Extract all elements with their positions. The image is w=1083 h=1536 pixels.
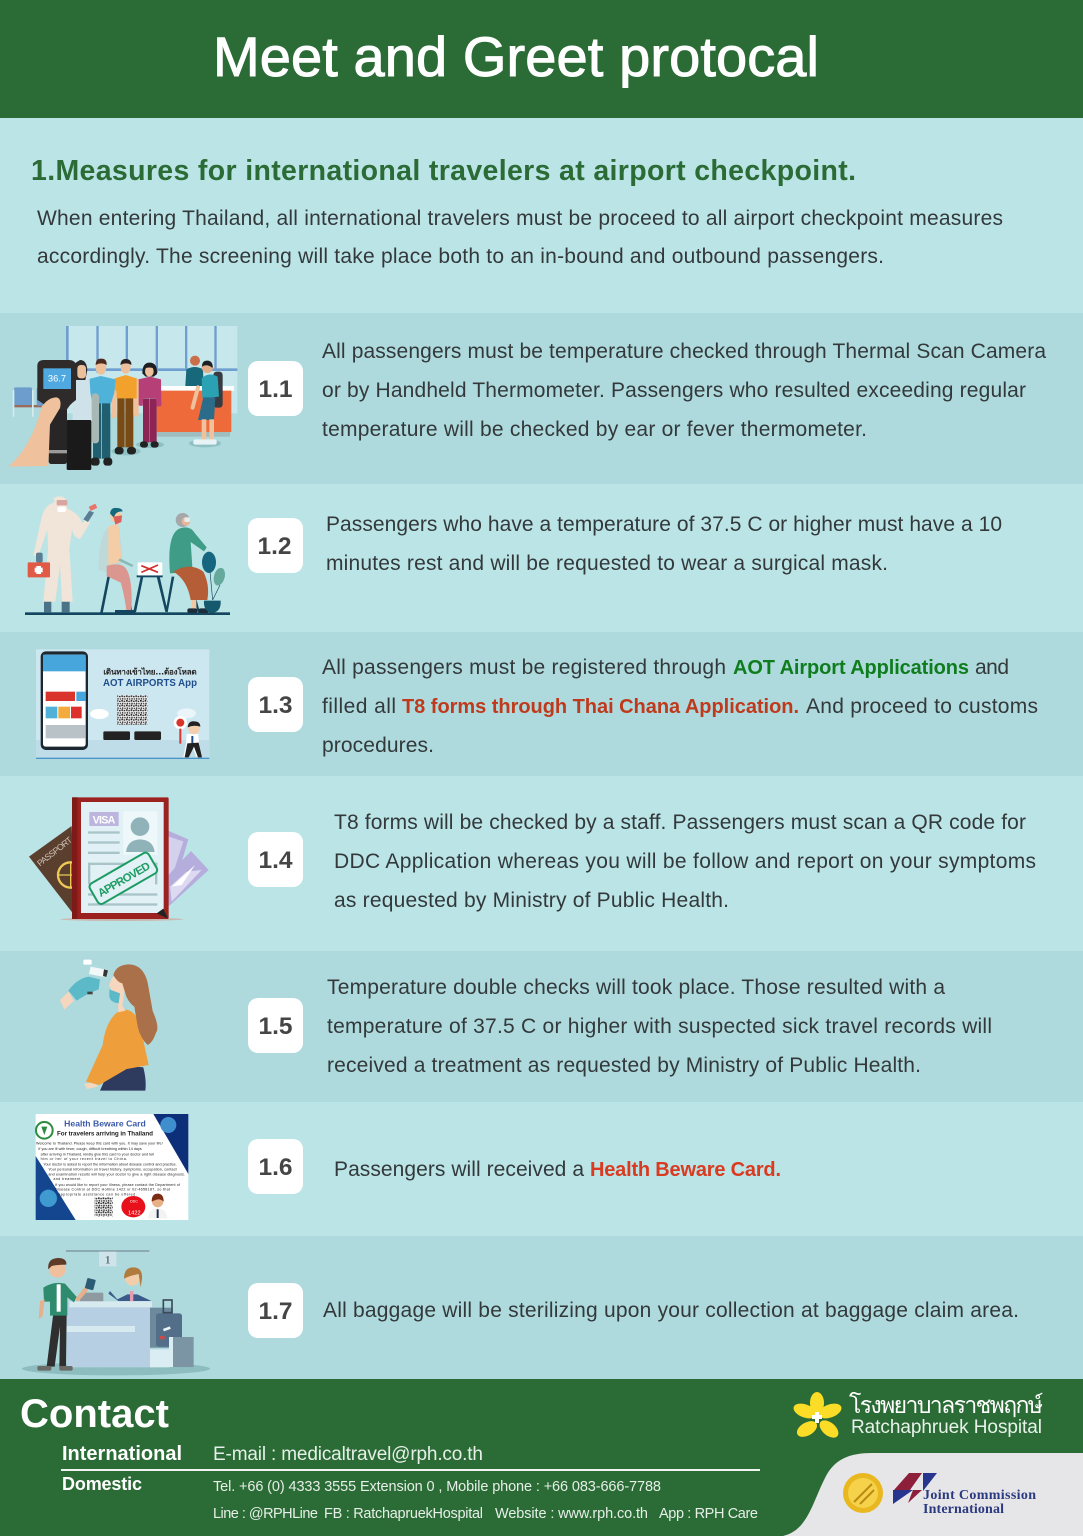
step text 1.7: All baggage will be sterilizing upon your collection at baggage claim area. (323, 1299, 1019, 1322)
panel: step 1.1 (0, 313, 1083, 484)
illustration: Health Beware Card: Disease Control at DDC Hotline 1422 or 02-4658187, so that (55, 1188, 170, 1192)
badge 1.4 (248, 832, 303, 887)
badge 1.6: 1.6 (258, 1154, 293, 1181)
step text 1.3: AOT Airport Applications (733, 657, 969, 679)
contact heading: Contact (20, 1392, 169, 1436)
domestic contact: FB : RatchapruekHospital (324, 1506, 483, 1522)
step text 1.2 (326, 513, 1002, 575)
domestic contact: Tel. +66 (0) 4333 3555 Extension 0 , Mobile phone : +66 083-666-7788 (213, 1479, 661, 1495)
illustration: Health Beware Card: him or her of your recent travel to China. (41, 1157, 127, 1161)
badge 1.4: 1.4 (258, 847, 293, 874)
panel: step 1.6 (0, 1102, 1083, 1236)
illustration: approved visa and passport: VISA (93, 814, 116, 826)
illustration: Health Beware Card: and treatment. (53, 1177, 82, 1181)
badge 1.2 (248, 518, 303, 573)
illustration: Health Beware Card: and examination results will help your doctor to give a right disease diagnosis. (48, 1172, 185, 1176)
international contact: International (62, 1443, 182, 1465)
panel: step 1.3 (0, 632, 1083, 776)
badge 1.3 (248, 677, 303, 732)
illustration: approved visa and passport: PASSPORT (35, 834, 75, 868)
illustration: seated passengers resting (25, 496, 230, 615)
step text 1.4 (334, 811, 1036, 912)
step text 1.1: temperature will be checked by ear or fever thermometer. (322, 418, 867, 441)
badge 1.7 (248, 1283, 303, 1338)
intro paragraph: When entering Thailand, all international travelers must be proceed to all airport checkpoint measures (37, 207, 1003, 230)
step text 1.3: filled all (322, 695, 396, 718)
logo: Joint Commission International: Joint Commission (923, 1488, 1036, 1503)
illustration: AOT Airports App banner (36, 649, 209, 759)
hospital name: โรงพยาบาลราชพฤกษ์ (849, 1392, 1044, 1419)
illustration: approved visa and passport: APPROVED (96, 860, 153, 900)
international contact (62, 1443, 483, 1465)
illustration: Health Beware Card: after arriving in Thailand, kindly give this card to your doctor and tell (41, 1152, 154, 1156)
illustration: Health Beware Card: Welcome to Thailand. Please keep this card with you. It may save your life! (36, 1142, 163, 1146)
step text 1.3 (322, 656, 1038, 757)
badge 1.5: 1.5 (258, 1013, 293, 1040)
illustration: Health Beware Card: appropriate assistance can be offered. (58, 1192, 137, 1196)
step text 1.6 (334, 1158, 781, 1181)
section intro (0, 118, 1083, 313)
step text 1.3: and (975, 656, 1009, 679)
hospital name (849, 1392, 1044, 1438)
step text 1.5 (327, 976, 992, 1077)
step text 1.3: T8 forms through Thai Chana Application. (402, 696, 799, 718)
section heading: 1.Measures for international travelers at airport checkpoint. (31, 155, 856, 187)
illustration: Health Beware Card: Your doctor is asked to report the information about disease control and practice. (43, 1162, 177, 1166)
footer: contact (0, 1379, 1083, 1536)
step text 1.4: DDC Application whereas you will be follow and report on your symptoms (334, 850, 1036, 873)
logo: Joint Commission International (893, 1473, 1036, 1517)
badge 1.2: 1.2 (257, 533, 292, 560)
step text 1.3: All passengers must be registered through (322, 656, 726, 679)
illustration: forehead temperature check (60, 960, 157, 1091)
badge 1.7: 1.7 (258, 1298, 293, 1325)
header banner (0, 0, 1083, 118)
step text 1.4: T8 forms will be checked by a staff. Passengers must scan a QR code for (334, 811, 1026, 834)
panel: step 1.4 (0, 776, 1083, 951)
accreditation panel (783, 1453, 1083, 1536)
illustration: AOT Airports App banner: เดินทางเข้าไทย...ต้องโหลด (103, 666, 197, 676)
illustration: AOT Airports App banner: AOT AIRPORTS App (103, 678, 197, 689)
illustration: thermal scan of passengers: 36.7 (48, 374, 66, 384)
step text 1.4: as requested by Ministry of Public Health. (334, 889, 729, 912)
domestic contact: Line : @RPHLine (213, 1506, 318, 1522)
step text 1.1 (322, 340, 1046, 441)
panel: step 1.5 (0, 951, 1083, 1102)
illustration: Health Beware Card: If you are ill with fever, cough, difficult breathing within 14 days (38, 1147, 142, 1151)
badge 1.6 (248, 1139, 303, 1194)
step text 1.6: Passengers will received a (334, 1158, 584, 1181)
domestic contact: App : RPH Care (659, 1506, 758, 1522)
logo: hospital flower (792, 1392, 843, 1441)
international contact: E-mail : medicaltravel@rph.co.th (213, 1444, 483, 1465)
panel: step 1.2 (0, 484, 1083, 632)
illustration: thermal scan of passengers (8, 326, 237, 470)
badge 1.1: 1.1 (258, 376, 293, 403)
domestic contact (62, 1474, 758, 1522)
intro paragraph: accordingly. The screening will take place both to an in-bound and outbound passengers. (37, 245, 884, 268)
title: Meet and Greet protocal (213, 25, 819, 88)
illustration: Health Beware Card: DDC (130, 1200, 138, 1204)
illustration: Health Beware Card (36, 1114, 188, 1220)
step text 1.5: temperature of 37.5 C or higher with suspected sick travel records will (327, 1015, 992, 1038)
step text 1.2: Passengers who have a temperature of 37.5 C or higher must have a 10 (326, 513, 1002, 536)
step text 1.1: or by Handheld Thermometer. Passengers who resulted exceeding regular (322, 379, 1026, 402)
logo: Joint Commission International: International (923, 1502, 1004, 1517)
step text 1.5: received a treatment as requested by Ministry of Public Health. (327, 1054, 921, 1077)
step text 1.2: minutes rest and will be requested to wear a surgical mask. (326, 552, 888, 575)
hospital name: Ratchaphruek Hospital (851, 1417, 1042, 1438)
intro paragraph (37, 207, 1003, 268)
illustration: Health Beware Card: Your personal information on travel history, symptoms, occupation, contact (48, 1167, 177, 1171)
illustration: approved visa and passport (29, 797, 209, 921)
illustration: baggage claim counter: 1 (105, 1254, 111, 1266)
illustration: Health Beware Card: For travelers arriving in Thailand (57, 1130, 153, 1137)
illustration: baggage claim counter (22, 1250, 210, 1375)
step text 1.3: procedures. (322, 734, 434, 757)
step text 1.5: Temperature double checks will took place. Those resulted with a (327, 976, 945, 999)
badge 1.3: 1.3 (258, 692, 293, 719)
illustration: Health Beware Card: If you would like to report your illness, please contact the Department of (55, 1183, 181, 1187)
illustration: Health Beware Card: 1422 (128, 1210, 141, 1216)
step text 1.1: All passengers must be temperature checked through Thermal Scan Camera (322, 340, 1046, 363)
step text 1.6: Health Beware Card. (590, 1159, 781, 1181)
step text 1.3: And proceed to customs (806, 695, 1038, 718)
illustration: Health Beware Card: Health Beware Card (64, 1119, 146, 1129)
domestic contact: Website : www.rph.co.th (495, 1506, 648, 1522)
badge 1.1 (248, 361, 303, 416)
badge 1.5 (248, 998, 303, 1053)
icon: gold seal (843, 1473, 883, 1513)
panel: step 1.7 (0, 1236, 1083, 1379)
domestic contact: Domestic (62, 1474, 142, 1494)
